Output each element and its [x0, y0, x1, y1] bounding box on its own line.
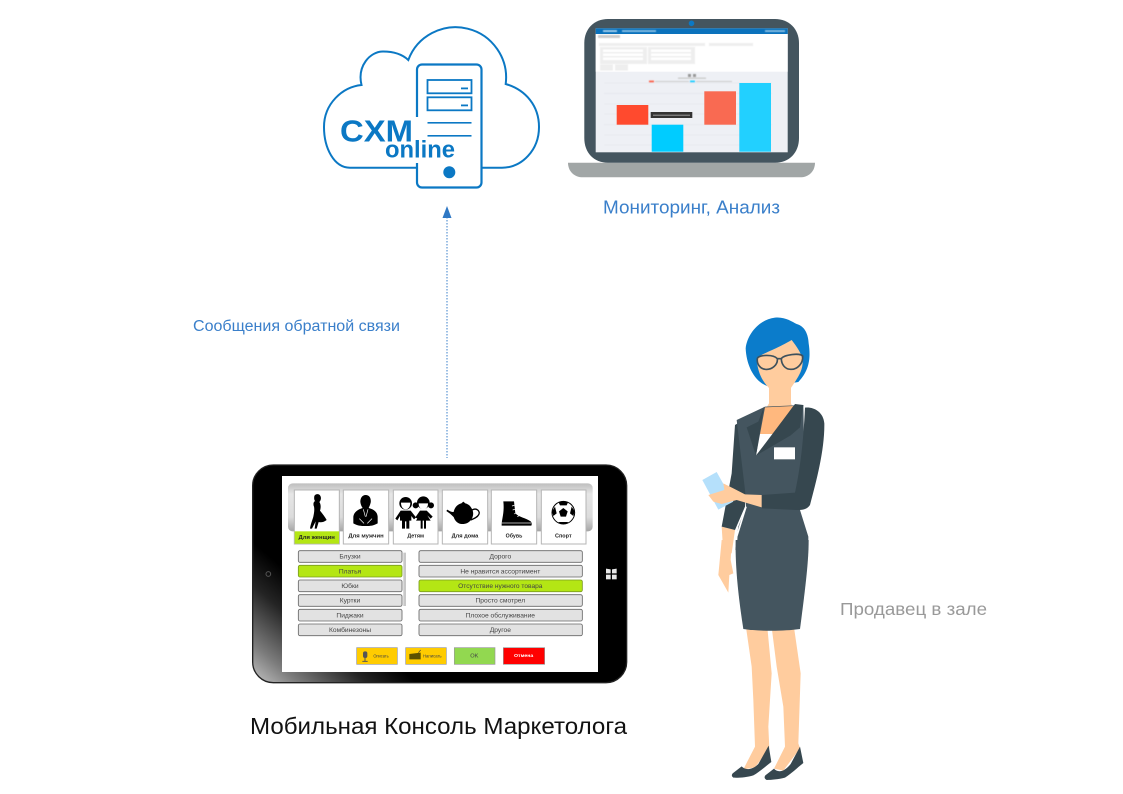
- shirt: [756, 434, 773, 456]
- tablet screen: [282, 476, 598, 672]
- windows button: [606, 569, 617, 579]
- figure: sales assistant: [702, 318, 824, 780]
- caption: marketer console: Мобильная Консоль Маркетолога: [250, 713, 628, 739]
- gap between arm and skirt: [736, 507, 746, 550]
- caption: feedback messages: Сообщения обратной связи: [193, 318, 400, 335]
- feedback reasons list: Просто смотрел: [476, 598, 525, 605]
- tab: for men: Для мужчин: [348, 534, 384, 540]
- reason categories list: Блузки: [339, 554, 361, 561]
- cloud outline: [324, 27, 539, 168]
- button: write: Написать: [423, 653, 442, 658]
- phone: [702, 472, 733, 510]
- reason categories list: Платья: [339, 568, 362, 575]
- reason categories list: Юбки: [341, 582, 359, 590]
- tab: for women: [294, 490, 339, 544]
- shoes: [732, 746, 771, 778]
- laptop with monitoring dashboard: [568, 19, 815, 177]
- glasses: [757, 354, 803, 369]
- name badge: [774, 447, 795, 459]
- face: [757, 340, 803, 395]
- tab: kids: [393, 490, 438, 544]
- reason categories list: [298, 551, 402, 636]
- feedback reasons list: [419, 551, 582, 636]
- button: cancel: [503, 648, 545, 664]
- dashboard screen: [596, 28, 788, 152]
- reason categories list: Пиджаки: [336, 612, 364, 619]
- camera dot: [266, 572, 271, 576]
- feedback reasons list: Не нравится ассортимент: [460, 568, 540, 575]
- scrollbar: [403, 553, 406, 606]
- logo text online: online: [385, 136, 455, 164]
- skirt: [736, 540, 809, 631]
- laptop base: [568, 163, 815, 177]
- chart bars: [617, 83, 771, 152]
- tablet body: [253, 465, 627, 683]
- tab: for home: [442, 490, 488, 544]
- button: describe: Описать: [373, 653, 389, 658]
- button: cancel: Отмена: [514, 653, 534, 659]
- chest: [760, 406, 793, 434]
- hair: [746, 318, 810, 387]
- laptop body: [584, 19, 799, 163]
- lower body: [718, 540, 809, 780]
- server tower: [417, 64, 482, 188]
- button: write: [406, 648, 446, 664]
- reason categories list: Комбинезоны: [329, 626, 371, 634]
- tab: shoes: [491, 490, 537, 544]
- upper body: [702, 318, 824, 553]
- camera: [689, 20, 694, 26]
- caption: monitoring: Мониторинг, Анализ: [603, 196, 780, 218]
- feedback reasons list: Дорого: [489, 554, 511, 561]
- legs: [743, 627, 772, 769]
- button: describe: [357, 648, 397, 664]
- neck: [764, 385, 794, 412]
- tab: sport: [541, 490, 586, 544]
- tablet: marketer mobile console: [253, 465, 627, 683]
- torso and skirt top: [735, 405, 808, 550]
- tab bar background: [288, 483, 593, 531]
- button: ok: [454, 648, 495, 664]
- lapels: [747, 407, 764, 456]
- arrow: feedback messages upward: [442, 206, 452, 458]
- left arm skin: [722, 527, 735, 553]
- hand and wrist: [718, 540, 733, 593]
- caption: sales assistant: Продавец в зале: [840, 599, 987, 619]
- feedback reasons list: Другое: [490, 627, 511, 634]
- tab: for men: [343, 490, 389, 544]
- button: ok: OK: [470, 653, 479, 659]
- logo text CXM: CXM: [340, 114, 413, 149]
- feedback reasons list: Плохое обслуживание: [466, 611, 535, 619]
- tab: for home: Для дома: [452, 534, 479, 540]
- tab: sport: Спорт: [555, 534, 572, 540]
- icon: CXM online cloud server: [324, 27, 539, 188]
- tab: kids: Детям: [407, 534, 424, 540]
- left sleeve: [722, 417, 748, 530]
- tab: for women: Для женщин: [298, 535, 335, 541]
- tab: shoes: Обувь: [506, 533, 523, 540]
- right sleeve: [762, 408, 824, 510]
- feedback reasons list: Отсутствие нужного товара: [458, 583, 543, 590]
- reason categories list: Куртки: [340, 598, 360, 605]
- hand: [708, 483, 762, 507]
